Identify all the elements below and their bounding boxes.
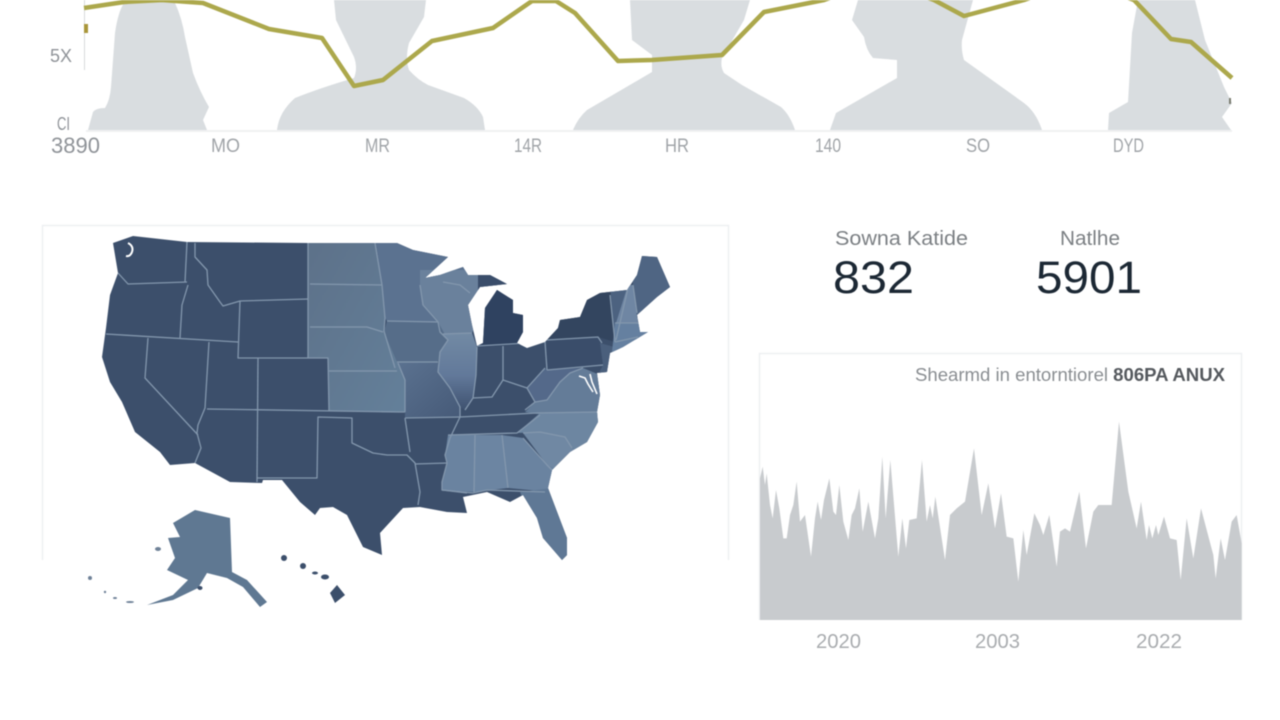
x axis labels: 14R bbox=[514, 136, 542, 157]
Alaska bbox=[147, 510, 267, 607]
Illinois bbox=[438, 333, 477, 410]
silhouettes bbox=[88, 0, 1232, 130]
axis tick marker bbox=[84, 24, 88, 33]
New York bbox=[548, 292, 614, 341]
Georgia bbox=[502, 434, 551, 491]
Kauai bbox=[281, 555, 287, 561]
silhouette 1 bbox=[88, 0, 209, 130]
Mississippi bbox=[442, 435, 475, 492]
Hawaii bbox=[281, 555, 345, 603]
Virginia bbox=[525, 368, 600, 414]
year labels: 2020 bbox=[816, 631, 861, 653]
y axis labels: 5X bbox=[50, 46, 72, 66]
chart title: Shearmd in entorntiorel 806PA ANUX bbox=[915, 365, 1225, 385]
state borders bbox=[106, 242, 640, 505]
Maui bbox=[321, 574, 329, 580]
stat label: Sowna Katide bbox=[835, 228, 968, 250]
silhouette 5 bbox=[1108, 0, 1232, 130]
New Jersey and Delaware bbox=[600, 344, 612, 373]
x axis labels: SO bbox=[966, 136, 990, 157]
Puget Sound bbox=[126, 243, 132, 256]
trend line bbox=[84, 0, 1232, 86]
x axis labels: 140 bbox=[815, 136, 841, 157]
Big Island bbox=[330, 585, 345, 603]
area series bbox=[760, 422, 1242, 620]
Molokai bbox=[312, 572, 318, 574]
x axis labels: HR bbox=[665, 136, 689, 157]
Lower Michigan bbox=[478, 290, 523, 346]
Massachusetts and Connecticut bbox=[612, 323, 647, 352]
x axis labels: 3890 bbox=[51, 133, 100, 158]
stat: first metric bbox=[833, 228, 968, 303]
chart: demographic trend with silhouettes bbox=[50, 0, 1232, 158]
stat label: Natlhe bbox=[1060, 228, 1120, 250]
dark western base bbox=[101, 235, 670, 560]
Maine bbox=[633, 256, 670, 318]
Iowa bbox=[384, 321, 448, 362]
mainland states bbox=[101, 235, 671, 560]
Upper Michigan dark tip bbox=[478, 274, 507, 290]
New Hampshire bbox=[616, 285, 638, 323]
y axis bbox=[84, 0, 85, 70]
Florida peninsula bbox=[520, 489, 568, 560]
Alabama bbox=[474, 435, 508, 492]
year labels: 2003 bbox=[975, 631, 1020, 653]
year labels: 2022 bbox=[1136, 631, 1182, 653]
West Virginia bbox=[527, 368, 583, 402]
stat value: 832 bbox=[833, 252, 914, 303]
panel: area chart bbox=[760, 354, 1242, 653]
panel: US map bbox=[42, 225, 728, 607]
small chart mark bbox=[1229, 98, 1231, 104]
Oahu bbox=[300, 563, 306, 569]
panel frame bbox=[42, 226, 728, 560]
x axis labels: DYD bbox=[1113, 136, 1144, 157]
Missouri bbox=[397, 362, 460, 418]
Wisconsin and Upper Michigan bbox=[420, 270, 478, 334]
stat value: 5901 bbox=[1036, 252, 1142, 303]
Aleutian islands and Kodiak bbox=[88, 547, 202, 603]
chart baseline bbox=[86, 130, 1232, 132]
Minnesota bbox=[376, 242, 464, 322]
silhouette 2 bbox=[277, 0, 485, 130]
y axis labels: CI bbox=[57, 114, 70, 134]
North Carolina bbox=[518, 413, 598, 450]
x axis labels: MR bbox=[365, 136, 390, 157]
x axis labels: MO bbox=[211, 136, 240, 157]
silhouette 4 bbox=[830, 0, 1042, 130]
year labels bbox=[816, 631, 1182, 653]
northern plains bbox=[308, 235, 405, 412]
x axis labels bbox=[51, 133, 1144, 158]
stat: second metric bbox=[1036, 228, 1142, 303]
silhouette 3 bbox=[573, 0, 795, 130]
y axis labels bbox=[50, 46, 72, 134]
Pennsylvania bbox=[547, 337, 603, 370]
panel frame bbox=[760, 354, 1242, 620]
Chesapeake Bay bbox=[579, 374, 597, 394]
South Carolina bbox=[524, 432, 574, 468]
Vermont bbox=[610, 290, 626, 326]
